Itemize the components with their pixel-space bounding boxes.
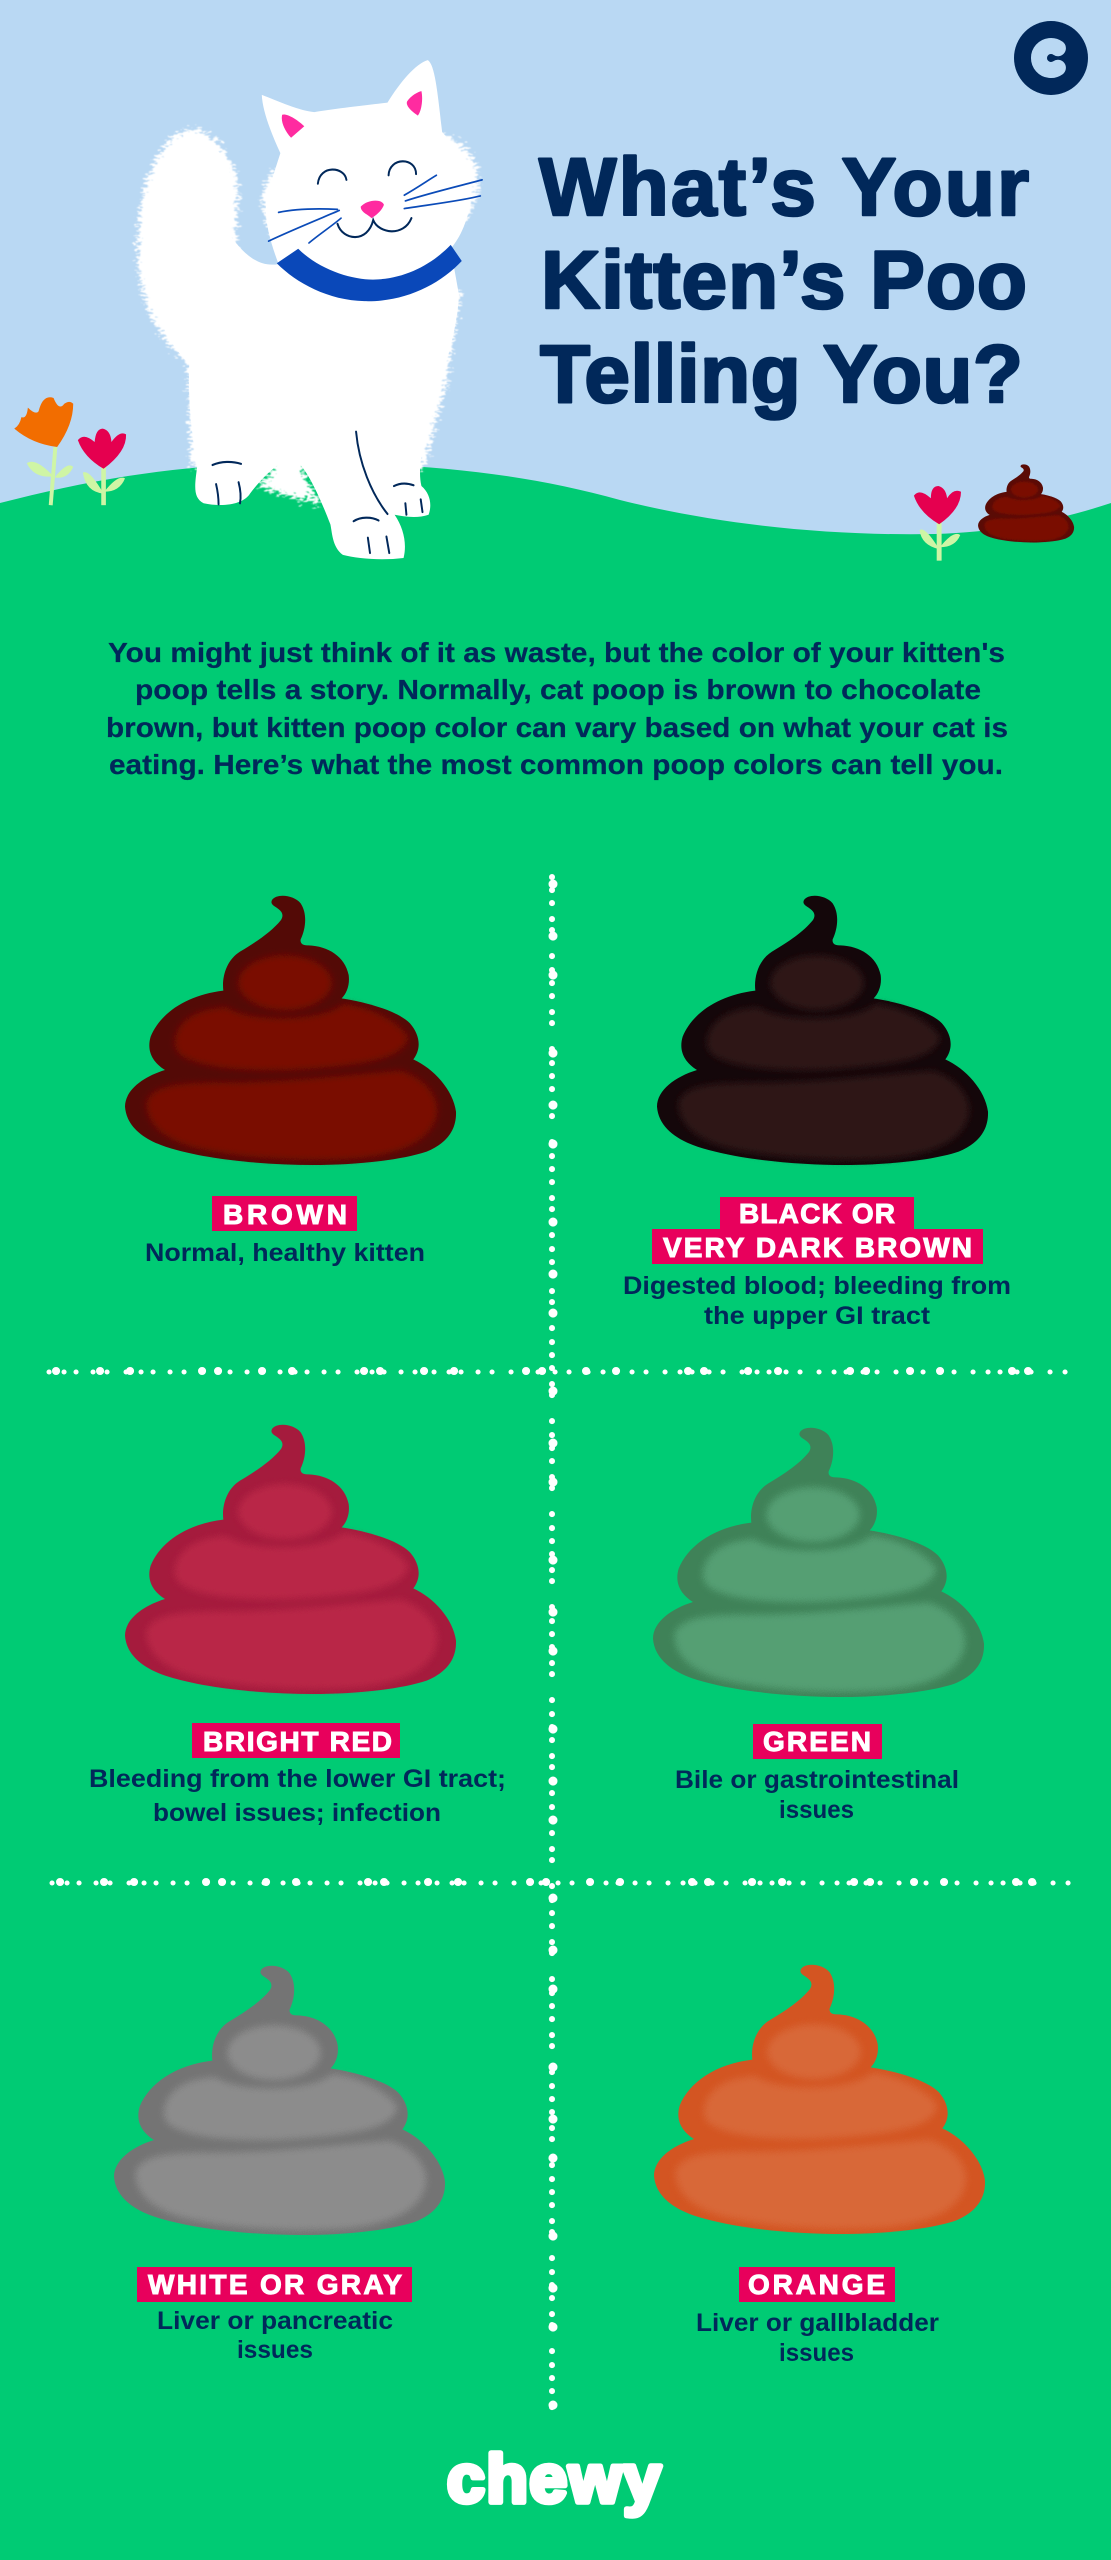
black label: BLACK OR (739, 1198, 895, 1229)
gray description: issues (237, 2336, 313, 2364)
red description: Bleeding from the lower GI tract; (89, 1765, 506, 1793)
intro paragraph: brown, but kitten poop color can vary based on what your cat is (106, 712, 1008, 743)
panel: orange (654, 1965, 985, 2367)
illustration: pink tulip left (78, 429, 126, 505)
panel: bright red (89, 1425, 506, 1827)
title: What’s Your (539, 142, 1029, 233)
black label: VERY DARK BROWN (663, 1232, 972, 1263)
gray description: Liver or pancreatic (157, 2307, 393, 2335)
icon: chewy C badge (1014, 21, 1088, 95)
red poop (125, 1425, 456, 1694)
kitten fur (137, 130, 479, 505)
illustration: white kitten (137, 60, 482, 559)
gray poop (114, 1966, 445, 2235)
intro paragraph: poop tells a story. Normally, cat poop is brown to chocolate (135, 674, 981, 705)
illustration: orange flower (14, 397, 73, 505)
green description (675, 1766, 959, 1824)
green description: issues (779, 1796, 854, 1824)
black description (623, 1272, 1011, 1330)
intro paragraph (106, 637, 1008, 780)
orange label: ORANGE (748, 2269, 885, 2300)
panel: brown (125, 896, 456, 1267)
orange description: Liver or gallbladder (696, 2309, 939, 2337)
illustration: pink tulip right (914, 486, 961, 561)
kitten whiskers (269, 175, 482, 243)
red description (89, 1765, 506, 1827)
intro paragraph: eating. Here’s what the most common poop colors can tell you. (109, 749, 1003, 780)
kitten ears (282, 91, 422, 138)
kitten body (146, 60, 471, 559)
brown description: Normal, healthy kitten (145, 1239, 425, 1267)
orange poop (654, 1965, 985, 2234)
dotted dividers (49, 877, 1072, 2410)
title (539, 142, 1029, 420)
black label (652, 1197, 983, 1264)
title: Kitten’s Poo (541, 235, 1027, 326)
kitten paws and leg lines (212, 432, 422, 553)
illustration: small brown poop (978, 464, 1074, 542)
black description: the upper GI tract (704, 1302, 931, 1330)
red description: bowel issues; infection (153, 1799, 441, 1827)
panel: white or gray (114, 1966, 445, 2364)
chewy logo: chewy (447, 2441, 661, 2517)
black description: Digested blood; bleeding from (623, 1272, 1011, 1300)
black poop (657, 896, 988, 1165)
kitten face (318, 161, 416, 237)
panel: black or very dark brown (623, 896, 1011, 1330)
orange description (696, 2309, 939, 2367)
kitten nose (361, 201, 384, 218)
green description: Bile or gastrointestinal (675, 1766, 959, 1794)
green label: GREEN (763, 1726, 871, 1757)
brown label: BROWN (223, 1199, 347, 1230)
title: Telling You? (540, 329, 1023, 420)
orange description: issues (779, 2339, 854, 2367)
panel: green (653, 1428, 984, 1824)
kitten collar (277, 245, 462, 301)
brown poop (125, 896, 456, 1165)
intro paragraph: You might just think of it as waste, but the color of your kitten's (108, 637, 1005, 668)
sky background (0, 0, 1111, 620)
red label: BRIGHT RED (203, 1726, 392, 1757)
gray description (157, 2307, 393, 2364)
green poop (653, 1428, 984, 1697)
gray label: WHITE OR GRAY (148, 2269, 402, 2300)
